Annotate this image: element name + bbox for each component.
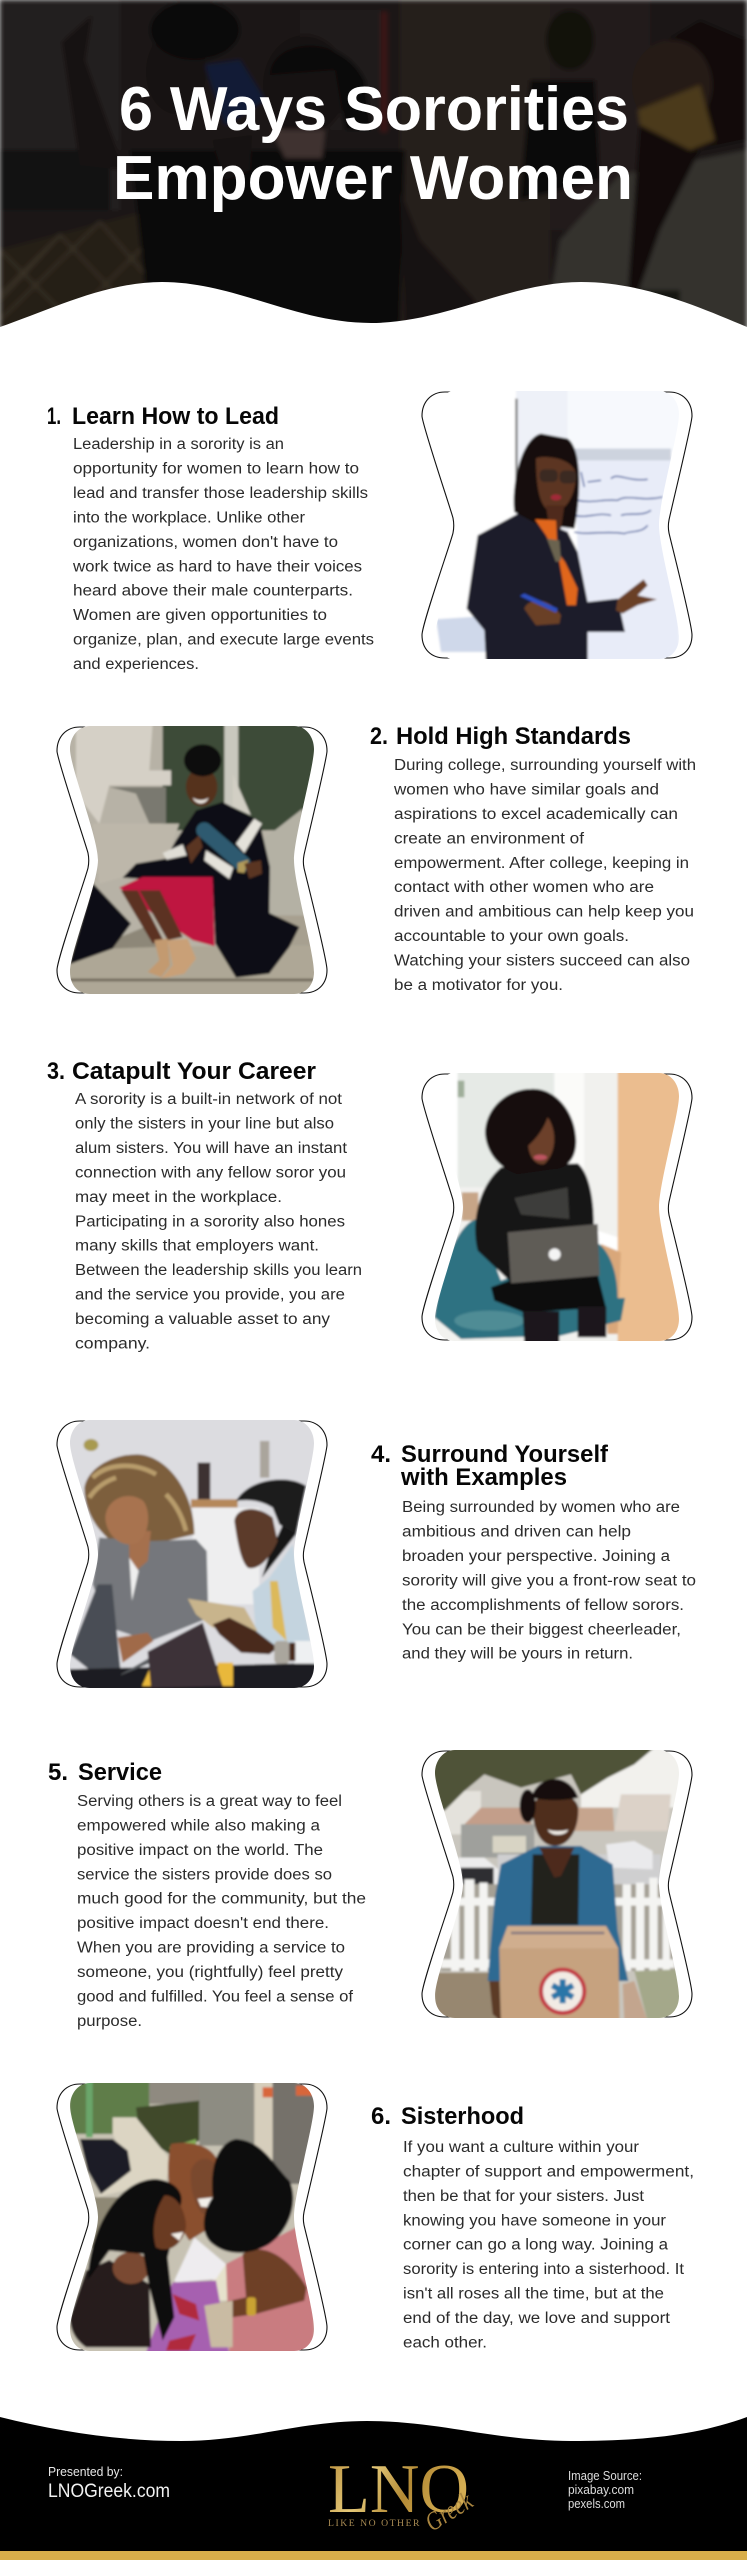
body text 6: knowing you have someone in your xyxy=(403,2212,666,2229)
panel: 3 Catapult Your Career xyxy=(47,1058,696,1352)
body text 1: and experiences. xyxy=(73,656,199,673)
body text 5: much good for the community, but the xyxy=(77,1891,366,1908)
body text 3: alum sisters. You will have an instant xyxy=(75,1140,348,1157)
body text 6: sorority is entering into a sisterhood. It xyxy=(403,2261,685,2278)
body text 3: and the service you provide, you are xyxy=(75,1287,345,1304)
photo 1: woman presenting at whiteboard xyxy=(418,389,696,662)
body text 6 xyxy=(403,2139,694,2351)
heading 4: 4. xyxy=(371,1441,391,1468)
body text 2: During college, surrounding yourself with xyxy=(394,757,696,774)
body text 4: ambitious and driven can help xyxy=(402,1524,631,1540)
title: Empower Women xyxy=(113,144,633,213)
heading 4: with Examples xyxy=(400,1464,567,1491)
body text 6: end of the day, we love and support xyxy=(403,2310,671,2327)
logo: LNO Greek: LIKE NO OTHER xyxy=(328,2519,421,2529)
body text 5: Serving others is a great way to feel xyxy=(77,1793,342,1810)
body text 5: positive impact doesn't end there. xyxy=(77,1915,329,1932)
image source xyxy=(568,2468,642,2511)
body text 4 xyxy=(402,1499,696,1663)
body text 1: Leadership in a sorority is an xyxy=(73,436,284,453)
body text 4: Being surrounded by women who are xyxy=(402,1499,680,1516)
photo 6: three women laughing and hugging xyxy=(53,2081,331,2354)
heading 5: Service xyxy=(78,1759,162,1786)
body text 2: women who have similar goals and xyxy=(393,781,659,798)
body text 3: only the sisters in your line but also xyxy=(75,1116,334,1132)
body text 6: each other. xyxy=(403,2334,487,2351)
body text 2: Watching your sisters succeed can also xyxy=(394,953,690,970)
title xyxy=(113,75,633,213)
body text 2: aspirations to excel academically can xyxy=(394,806,678,823)
body text 1: organize, plan, and execute large events xyxy=(73,632,374,649)
body text 6: corner can go a long way. Joining a xyxy=(403,2237,668,2254)
body text 5: When you are providing a service to xyxy=(77,1940,345,1957)
footer band xyxy=(0,2417,747,2560)
photo 3: woman with laptop on teal chair xyxy=(418,1071,696,1344)
body text 5: someone, you (rightfully) feel pretty xyxy=(77,1964,343,1981)
body text 2: create an environment of xyxy=(394,830,585,847)
body text 5: purpose. xyxy=(77,2013,142,2030)
body text 3: becoming a valuable asset to any xyxy=(75,1311,330,1328)
presented by: LNOGreek.com xyxy=(48,2481,170,2502)
image source: pixabay.com xyxy=(568,2482,634,2497)
body text 6: chapter of support and empowerment, xyxy=(403,2163,694,2180)
body text 1: opportunity for women to learn how to xyxy=(73,460,359,478)
header wave xyxy=(0,282,747,345)
body text 3: connection with any fellow soror you xyxy=(75,1164,346,1181)
image source: pexels.com xyxy=(568,2496,625,2511)
body text 4: sorority will give you a front-row seat to xyxy=(402,1572,696,1589)
logo: LNO Greek: Greek xyxy=(420,2486,478,2537)
body text 1: into the workplace. Unlike other xyxy=(73,509,305,526)
body text 1: heard above their male counterparts. xyxy=(73,583,353,600)
body text 5: service the sisters provide does so xyxy=(77,1866,332,1883)
body text 4: and they will be yours in return. xyxy=(402,1646,633,1663)
logo: LNO Greek: LNO xyxy=(328,2451,469,2528)
body text 5: empowered while also making a xyxy=(77,1817,320,1834)
image source: Image Source: xyxy=(568,2468,642,2483)
body text 3: may meet in the workplace. xyxy=(75,1189,282,1206)
body text 5: positive impact on the world. The xyxy=(77,1842,323,1859)
body text 6: If you want a culture within your xyxy=(403,2139,639,2156)
body text 3: A sorority is a built-in network of not xyxy=(75,1091,343,1108)
header photo: women marching, darkened xyxy=(0,0,747,330)
title: 6 Ways Sororities xyxy=(119,75,629,144)
panel: 4 Surround Yourself with Examples xyxy=(53,1418,696,1691)
panel: 5 Service xyxy=(48,1748,696,2030)
heading 1: 1. xyxy=(47,403,61,430)
heading 2: Hold High Standards xyxy=(396,723,631,750)
heading 4: Surround Yourself xyxy=(401,1441,609,1468)
heading 6: 6. xyxy=(371,2103,391,2130)
body text 2: empowerment. After college, keeping in xyxy=(394,855,689,872)
panel: 2 Hold High Standards xyxy=(53,723,696,997)
body text 5: good and fulfilled. You feel a sense of xyxy=(77,1988,354,2005)
body text 1 xyxy=(72,436,374,673)
body text 4: broaden your perspective. Joining a xyxy=(402,1548,670,1565)
body text 4: the accomplishments of fellow sorors. xyxy=(402,1597,684,1614)
heading 3: 3. xyxy=(47,1058,65,1085)
presented by: Presented by: xyxy=(48,2464,123,2479)
body text 1: organizations, women don't have to xyxy=(73,534,338,551)
panel: 6 Sisterhood xyxy=(53,2081,694,2354)
photo 5: woman holding donation box xyxy=(418,1748,696,2023)
panel: 1 Learn How to Lead xyxy=(47,389,696,673)
heading 5: 5. xyxy=(48,1759,68,1786)
body text 3: company. xyxy=(75,1336,150,1352)
body text 3: Between the leadership skills you learn xyxy=(75,1262,362,1279)
body text 3: Participating in a sorority also hones xyxy=(75,1213,345,1230)
body text 2: contact with other women who are xyxy=(394,879,654,896)
body text 3 xyxy=(75,1091,362,1352)
body text 2: driven and ambitious can help keep you xyxy=(394,904,694,921)
heading 1: Learn How to Lead xyxy=(72,403,279,430)
heading 3: Catapult Your Career xyxy=(72,1058,316,1085)
body text 1: work twice as hard to have their voices xyxy=(72,558,362,575)
body text 1: lead and transfer those leadership skills xyxy=(73,485,368,502)
body text 3: many skills that employers want. xyxy=(75,1238,319,1255)
photo 2: graduate on steps xyxy=(53,724,331,997)
heading 6: Sisterhood xyxy=(401,2103,524,2130)
heading 4 xyxy=(371,1441,609,1491)
body text 2: be a motivator for you. xyxy=(394,977,563,994)
body text 6: isn't all roses all the time, but at the xyxy=(403,2286,664,2303)
gold bar xyxy=(0,2551,747,2560)
presented by xyxy=(48,2464,170,2502)
body text 2 xyxy=(393,757,696,994)
photo 4: two colleagues at a table xyxy=(53,1418,331,1691)
heading 2: 2. xyxy=(370,723,388,750)
body text 6: then be that for your sisters. Just xyxy=(403,2188,645,2205)
body text 5 xyxy=(77,1793,366,2030)
body text 4: You can be their biggest cheerleader, xyxy=(402,1621,681,1638)
body text 2: accountable to your own goals. xyxy=(394,928,629,945)
body text 1: Women are given opportunities to xyxy=(73,607,327,624)
